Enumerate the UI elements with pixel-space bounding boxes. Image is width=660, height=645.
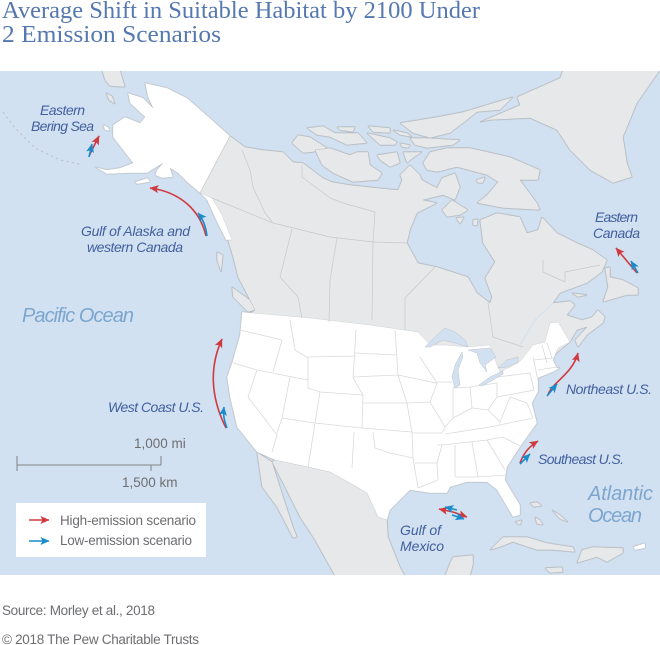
Baja California bbox=[257, 452, 297, 538]
legend: Low-emission scenario bbox=[60, 533, 192, 548]
Alaskan and Siberian islands bbox=[102, 70, 150, 184]
title: 2 Emission Scenarios bbox=[2, 22, 221, 48]
scale bar bbox=[17, 436, 186, 490]
ocean label: Atlantic Ocean: Ocean bbox=[588, 505, 642, 527]
region label: Northeast U.S.: Northeast U.S. bbox=[566, 381, 652, 397]
region label: Gulf of Alaska and western Canada bbox=[81, 223, 191, 255]
ocean label: Atlantic Ocean bbox=[587, 483, 653, 527]
arrows: Gulf of Alaska bbox=[150, 188, 207, 236]
title bbox=[2, 0, 480, 48]
St Lawrence river bbox=[520, 303, 553, 345]
region label: Eastern Canada: Eastern bbox=[595, 209, 638, 225]
source note: Source: Morley et al., 2018 bbox=[2, 603, 155, 618]
arrows: Northeast bbox=[547, 353, 578, 396]
legend bbox=[16, 503, 206, 557]
Yucatan bbox=[445, 555, 473, 576]
region label: Gulf of Mexico: Mexico bbox=[400, 538, 444, 554]
arrows: Southeast bbox=[520, 441, 538, 464]
region label: Gulf of Mexico bbox=[400, 522, 444, 554]
arrows: Eastern Bering Sea bbox=[89, 136, 99, 157]
region label: Eastern Bering Sea: Bering Sea bbox=[31, 118, 94, 134]
region label: Southeast U.S.: Southeast U.S. bbox=[538, 451, 624, 467]
scale bar: 1,000 mi bbox=[134, 436, 186, 451]
arrows: Gulf of Mexico bbox=[439, 507, 467, 519]
region label: Gulf of Alaska and western Canada: Gulf of Alaska and bbox=[81, 223, 191, 239]
ocean label: Atlantic Ocean: Atlantic bbox=[587, 483, 653, 505]
map of North America bbox=[0, 70, 660, 576]
Great Lakes bbox=[425, 328, 518, 388]
legend: High-emission scenario bbox=[60, 513, 196, 528]
region label: Eastern Canada: Canada bbox=[593, 225, 640, 241]
region label: Gulf of Alaska and western Canada: western Canada bbox=[87, 239, 183, 255]
state boundaries bbox=[230, 320, 557, 488]
region label: Gulf of Mexico: Gulf of bbox=[400, 522, 443, 538]
Canadian Arctic islands bbox=[292, 97, 540, 226]
contiguous United States bbox=[227, 312, 570, 520]
Greenland bbox=[480, 70, 660, 183]
Mexico mainland bbox=[272, 460, 405, 576]
province boundaries bbox=[200, 136, 600, 347]
ocean label: Pacific Ocean: Pacific Ocean bbox=[22, 305, 134, 327]
land masses with coastline shading bbox=[95, 70, 660, 576]
Alaska panhandle bbox=[200, 193, 232, 240]
arrows: Eastern Canada bbox=[616, 248, 638, 273]
Canadian offshore islands bbox=[217, 252, 638, 312]
region label: Eastern Bering Sea: Eastern bbox=[40, 102, 85, 118]
Caribbean islands bbox=[490, 502, 645, 573]
Aleutian Islands bbox=[3, 112, 83, 165]
scale bar: 1,500 km bbox=[122, 475, 178, 490]
Alaska bbox=[95, 83, 230, 193]
region label: West Coast U.S.: West Coast U.S. bbox=[108, 399, 204, 415]
region label: Eastern Canada bbox=[593, 209, 640, 241]
region label: Eastern Bering Sea bbox=[31, 102, 94, 134]
arrows: West Coast bbox=[213, 339, 227, 428]
Canada mainland bbox=[200, 136, 608, 372]
